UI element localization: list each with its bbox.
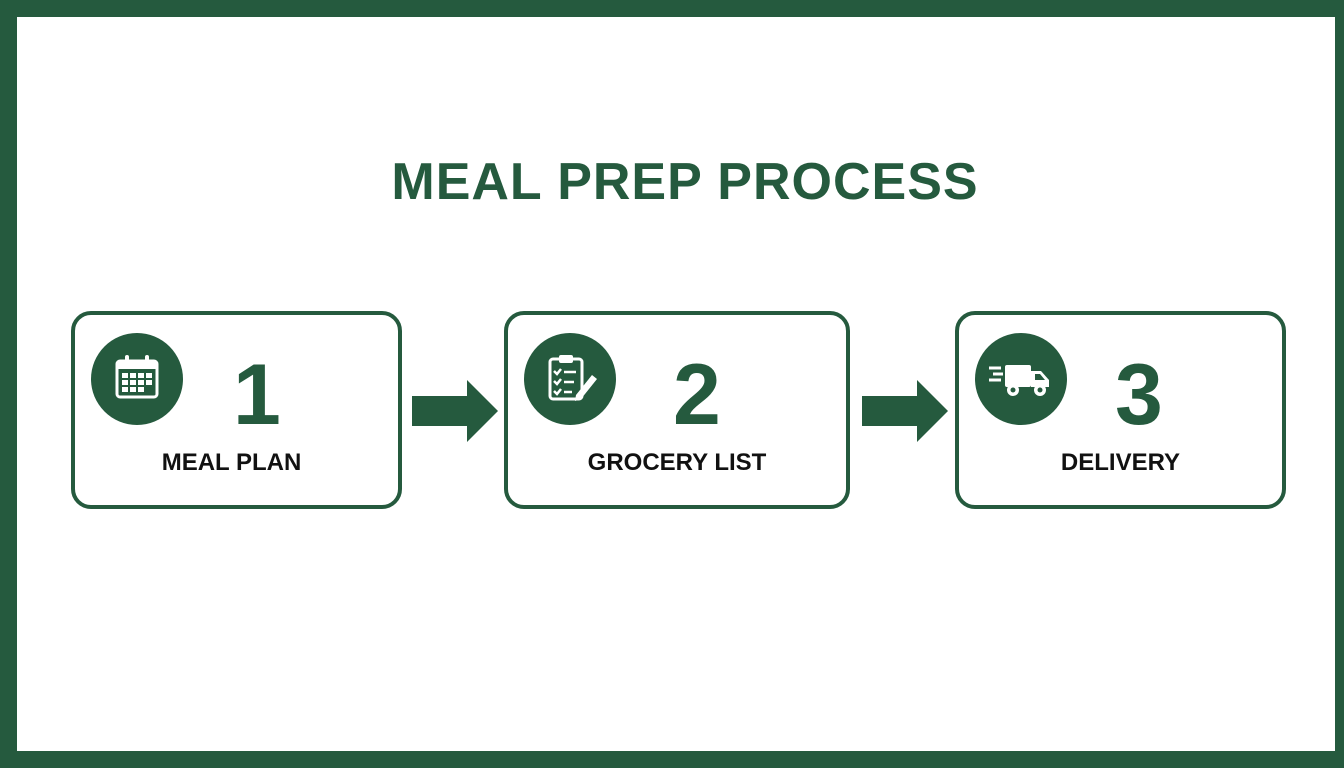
number 3: 3 [1115,347,1163,443]
number 1: 1 [233,347,281,443]
label: MEAL PLAN [162,449,301,476]
arrow 2 [862,380,948,442]
label: DELIVERY [1061,449,1180,476]
icon: truck [975,333,1067,425]
label: GROCERY LIST [588,449,766,476]
icon: calendar [91,333,183,425]
panel: step 2 grocery list [504,311,850,509]
icon: clipboard [524,333,616,425]
number 2: 2 [673,347,721,443]
title: MEAL PREP PROCESS [391,153,979,211]
arrow 1 [412,380,498,442]
panel: step 1 meal plan [71,311,402,509]
panel: step 3 delivery [955,311,1286,509]
